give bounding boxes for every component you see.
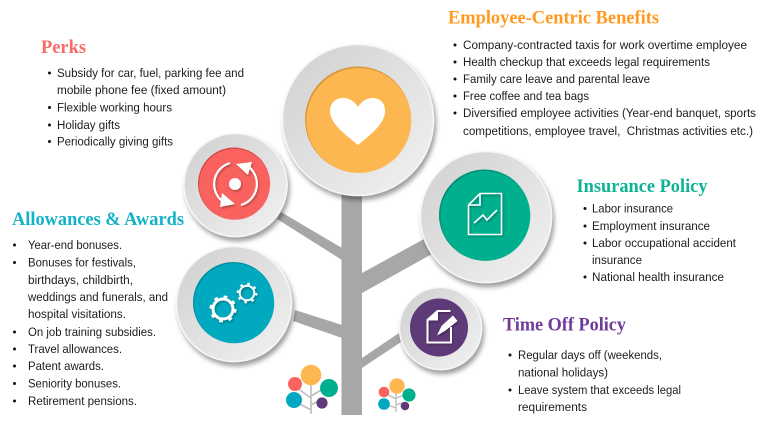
list: time off policy: national holidays)	[518, 366, 608, 380]
heading: insurance policy: Insurance Policy	[576, 177, 708, 197]
list: employee-centric benefits: Company-contracted taxis for work overtime employee	[463, 38, 747, 52]
list: allowances and awards: Seniority bonuses.	[28, 376, 121, 390]
list: perks: mobile phone fee (fixed amount)	[57, 83, 226, 97]
list: allowances and awards: Travel allowances.	[28, 342, 122, 356]
icon: heart	[330, 98, 385, 145]
list: employee-centric benefits: Health checkup that exceeds legal requirements	[463, 55, 710, 69]
list: time off policy: requirements	[518, 400, 587, 414]
badge: time off note	[400, 288, 482, 370]
list: allowances and awards: hospital visitations.	[28, 307, 126, 321]
list: perks: Subsidy for car, fuel, parking fee and	[57, 66, 244, 80]
panel: allowances and awards	[12, 210, 184, 408]
icon: note and pencil	[428, 311, 458, 342]
list: perks: Periodically giving gifts	[57, 134, 173, 148]
list: allowances and awards: Retirement pensions.	[28, 394, 137, 408]
list: time off policy: Leave system that exceeds legal	[518, 383, 681, 397]
badge: allowances gears	[176, 246, 292, 362]
list: time off policy	[508, 348, 681, 414]
icon: gears	[211, 284, 256, 321]
panel: employee-centric benefits	[448, 8, 756, 138]
small tree 2	[378, 378, 416, 412]
list: insurance policy	[584, 202, 737, 284]
panel: insurance policy	[576, 177, 737, 284]
list: insurance policy: insurance	[592, 253, 642, 267]
list: insurance policy: Labor occupational accident	[592, 236, 737, 250]
list: employee-centric benefits: Diversified employee activities (Year-end banquet, sports	[463, 106, 756, 120]
list: allowances and awards: On job training subsidies.	[28, 325, 156, 339]
heading: time off policy: Time Off Policy	[503, 316, 627, 336]
list: employee-centric benefits: competitions, employee travel, Christmas activities etc.)	[463, 124, 753, 138]
list: employee-centric benefits: Free coffee and tea bags	[463, 89, 589, 103]
heading: allowances and awards: Allowances & Awards	[12, 210, 184, 230]
heading: employee-centric benefits: Employee-Centric Benefits	[448, 8, 659, 28]
badge: insurance document	[420, 152, 552, 282]
list: allowances and awards: weddings and funerals, and	[27, 290, 168, 304]
badge: heart	[282, 44, 434, 196]
badge: perks refresh	[184, 134, 287, 236]
tree trunk and branches	[277, 185, 432, 415]
list: insurance policy: Labor insurance	[592, 202, 673, 216]
list: insurance policy: National health insurance	[592, 270, 724, 284]
panel: time off policy	[503, 316, 681, 414]
list: perks	[48, 66, 244, 148]
icon: refresh arrows	[214, 162, 257, 207]
list: perks: Flexible working hours	[57, 100, 172, 114]
panel: perks	[41, 38, 244, 148]
list: insurance policy: Employment insurance	[592, 219, 710, 233]
icon: document with chart	[468, 194, 502, 234]
list: allowances and awards: Bonuses for festivals,	[28, 256, 136, 270]
list: allowances and awards	[13, 238, 168, 408]
small tree 1	[286, 365, 338, 414]
heading: perks: Perks	[41, 38, 86, 58]
list: allowances and awards: Patent awards.	[28, 359, 104, 373]
list: allowances and awards: Year-end bonuses.	[28, 238, 122, 252]
list: employee-centric benefits	[454, 38, 756, 138]
list: employee-centric benefits: Family care leave and parental leave	[463, 72, 650, 86]
list: time off policy: Regular days off (weekends,	[518, 348, 662, 362]
list: perks: Holiday gifts	[57, 118, 120, 132]
list: allowances and awards: birthdays, childbirth,	[28, 273, 133, 287]
